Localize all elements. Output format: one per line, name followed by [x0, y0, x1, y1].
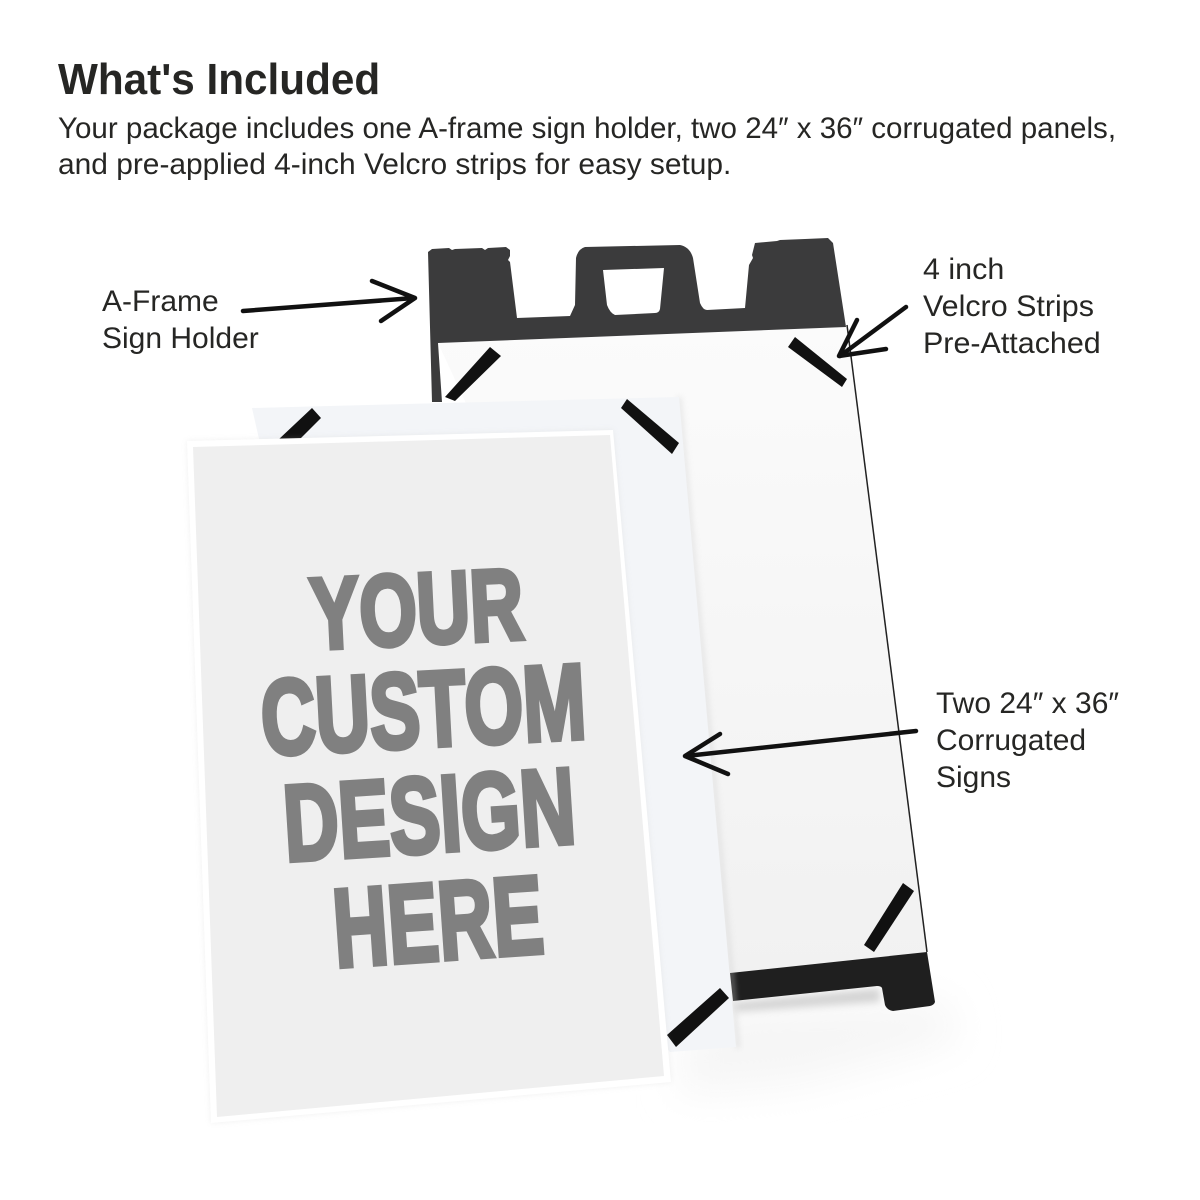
label: signs: Two 24″ x 36″ [936, 687, 1119, 720]
holder top handle [428, 238, 846, 402]
arrow: A-frame [243, 281, 415, 321]
custom design text [258, 549, 589, 991]
custom design text: HERE [329, 853, 547, 991]
label: velcro: Velcro Strips [923, 290, 1094, 323]
custom design text: DESIGN [280, 745, 579, 884]
title: What's Included [58, 55, 380, 104]
holder right edge [847, 325, 927, 952]
arrow: signs [685, 731, 916, 774]
velcro strips on holder [445, 337, 914, 952]
label: A-frame: Sign Holder [102, 322, 259, 355]
corrugated back panel [252, 397, 736, 1052]
custom design text: CUSTOM [258, 641, 589, 778]
label: velcro [923, 253, 1101, 360]
holder face [438, 327, 927, 973]
label: A-frame [102, 285, 259, 355]
arrow: velcro [839, 307, 906, 356]
A-frame sign holder [428, 238, 935, 1011]
intro text: Your package includes one A-frame sign holder, two 24″ x 36″ corrugated panels, [58, 112, 1116, 145]
front panel shadow [187, 430, 671, 1123]
label: signs [936, 687, 1119, 794]
label: signs: Signs [936, 761, 1011, 794]
label: A-frame: A-Frame [102, 285, 219, 318]
holder base [730, 952, 935, 1011]
corrugated front panel [187, 430, 671, 1123]
intro text: and pre-applied 4-inch Velcro strips for easy setup. [58, 148, 731, 181]
label: velcro: Pre-Attached [923, 327, 1101, 360]
intro text [58, 112, 1116, 181]
custom design text: YOUR [308, 549, 526, 671]
label: signs: Corrugated [936, 724, 1086, 757]
label: velcro: 4 inch [923, 253, 1004, 286]
floor shadow [680, 988, 960, 1095]
back panel shadow [679, 397, 738, 1048]
